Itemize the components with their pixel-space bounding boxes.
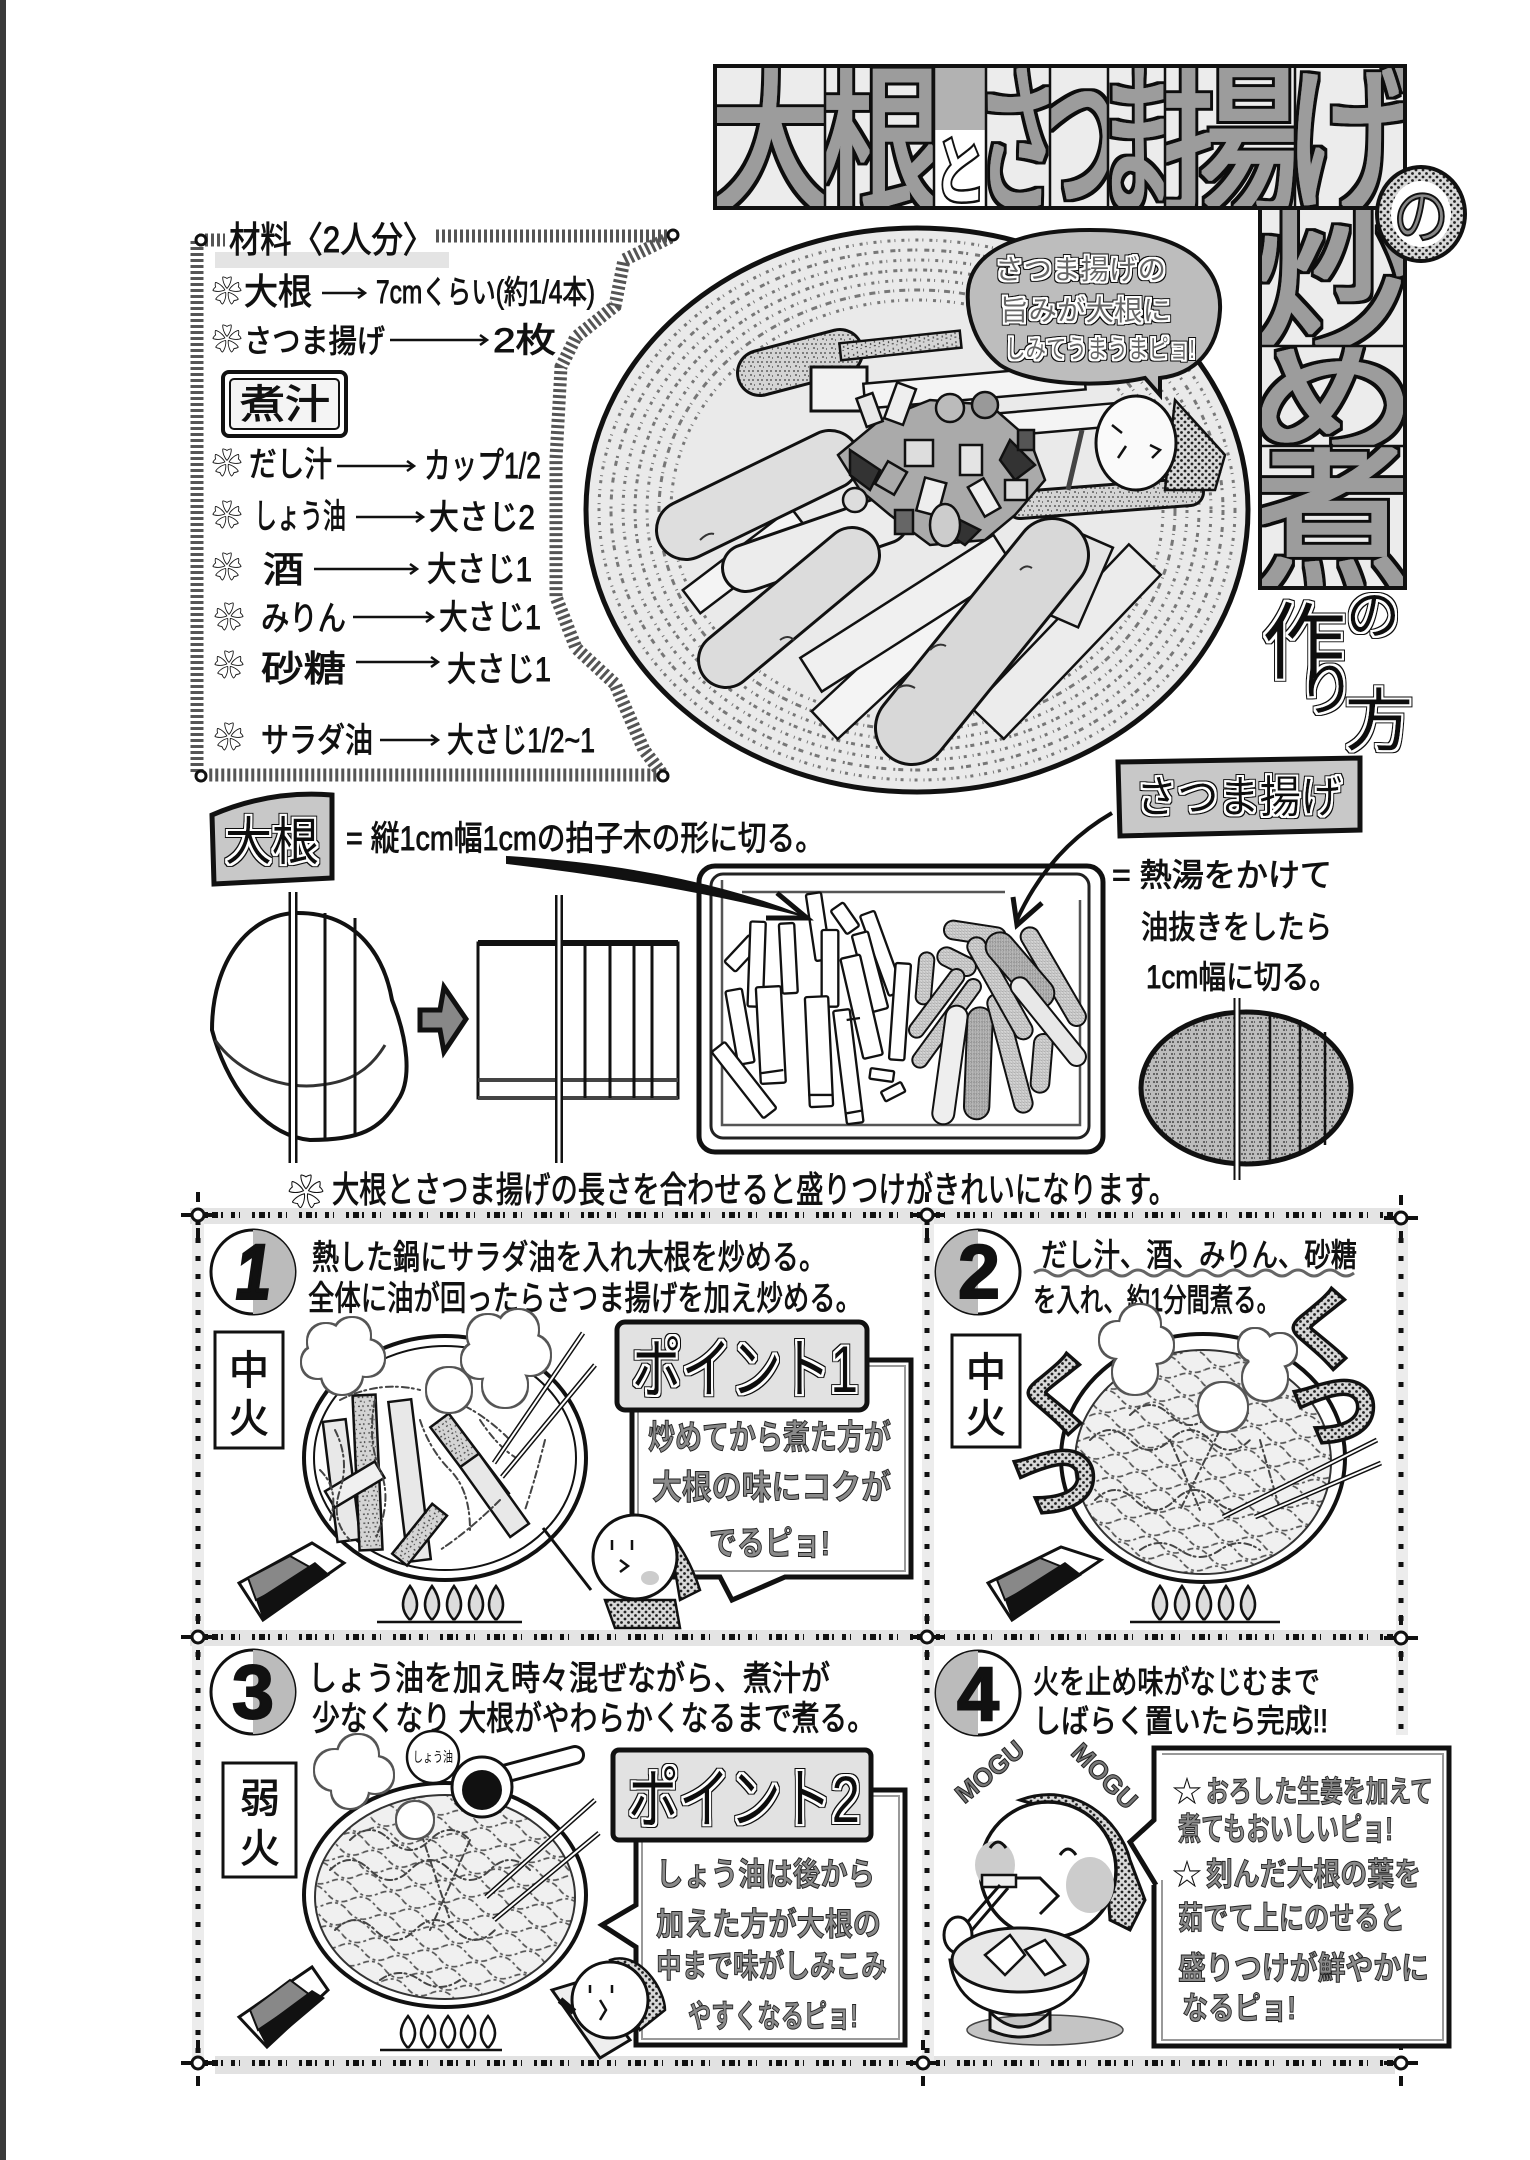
flames: [380, 2016, 502, 2050]
tag: satsuma-age: [1118, 758, 1360, 836]
tips callout: 盛りつけが鮮やかに: [1178, 1950, 1429, 1986]
ingredient: soy sauce: [212, 498, 535, 537]
heading smear: [215, 252, 449, 268]
speech bubble: しみてうまうまピョ!: [1005, 334, 1195, 364]
title: daikon and satsuma-age: [706, 51, 1413, 235]
heat label: medium: 中: [229, 1349, 269, 1393]
step 4 text: しばらく置いたら完成!!: [1033, 1703, 1328, 1739]
ingredient: soy sauce: しょう油: [254, 498, 346, 536]
point 2 callout: しょう油は後から: [656, 1856, 875, 1892]
speech bubble: さつま揚げの: [995, 254, 1166, 285]
chopsticks: [494, 1333, 595, 1477]
sound effect: MOGU MOGU: MOGU: [949, 1734, 1030, 1809]
ingredient: daikon: 7cmくらい(約1/4本): [376, 274, 595, 310]
tips callout: おろした生姜を加えて: [1206, 1776, 1433, 1809]
mascot eating: [944, 1795, 1145, 2045]
step number 4: 4: [957, 1652, 999, 1737]
panel: step 4: [936, 1651, 1449, 2046]
sound effect: simmering: く: [1015, 1349, 1099, 1443]
diagram: round satsuma-age being cut: [1141, 998, 1351, 1180]
ingredient: salad oil: [214, 722, 595, 760]
step 2 text: [1033, 1237, 1357, 1318]
title: how to make: 方: [1345, 684, 1413, 760]
ingredient: dashi: [212, 445, 541, 486]
title: how to make: の: [1346, 586, 1400, 646]
note: match lengths: ❀: [288, 1172, 324, 1213]
note: match lengths: 大根とさつま揚げの長さを合わせると盛りつけがきれいになります。: [332, 1169, 1176, 1210]
sound effect: MOGU MOGU: [949, 1734, 1144, 1815]
title: how to make: [1262, 586, 1413, 760]
heat label: low: 火: [240, 1827, 280, 1871]
arrow: satsuma-age to tray: [1013, 813, 1112, 925]
panel: step 2: [936, 1230, 1381, 1622]
pan handle: [239, 1543, 344, 1620]
ladle: [452, 1755, 575, 1817]
satsuma-age preparation text: [1112, 857, 1337, 995]
tag: daikon: 大根: [225, 814, 319, 872]
step number 2: 2: [958, 1230, 1000, 1315]
step 1 text: 全体に油が回ったらさつま揚げを加え炒める。: [308, 1280, 862, 1318]
title: how to make: 作: [1262, 596, 1346, 690]
ingredient: soy sauce: ❀: [212, 500, 242, 533]
ingredient: salad oil: 大さじ1/2~1: [447, 722, 595, 760]
ingredient: daikon: 大根: [244, 271, 312, 312]
tips callout: ☆: [1172, 1859, 1202, 1892]
ingredient: satsuma-age: さつま揚げ: [244, 323, 385, 359]
pan with food, step 2: [988, 1305, 1381, 1622]
diagram: round daikon being cut: [212, 892, 407, 1163]
ingredient: mirin: 大さじ1: [439, 599, 541, 637]
step 3 text: [308, 1660, 875, 1738]
flames: [1130, 1586, 1280, 1622]
note: match lengths: [288, 1169, 1176, 1213]
title letter cell: め: め: [1248, 327, 1418, 473]
steps frame: [181, 1192, 1418, 2086]
ingredient: salad oil: サラダ油: [261, 722, 373, 760]
mascot with soy sauce bottle: [552, 1958, 665, 2058]
garnish pile: [838, 382, 1045, 546]
tips callout: [1130, 1748, 1449, 2046]
page edge bar: [0, 0, 6, 2160]
ingredient: sake: 酒: [263, 549, 304, 590]
heat label: medium: 火: [229, 1397, 269, 1441]
ingredient: sugar: [214, 648, 551, 689]
tag: daikon: [212, 794, 332, 884]
ingredient: satsuma-age: ❀: [212, 324, 242, 357]
steam: [315, 1735, 433, 1838]
chopsticks: [1223, 1440, 1381, 1517]
point 1 callout: でるピョ!: [709, 1525, 830, 1563]
satsuma-age preparation text: 油抜きをしたら: [1141, 909, 1332, 945]
point 2 callout: やすくなるピョ!: [688, 1998, 858, 2034]
ingredient: mirin: [214, 599, 541, 638]
heat label: medium: [952, 1335, 1020, 1447]
mascot with pointer: [543, 1515, 700, 1628]
ingredient: sugar: 砂糖: [261, 648, 346, 689]
point 1 callout: [617, 1322, 911, 1600]
point 2 callout: 加えた方が大根の: [656, 1906, 881, 1942]
step 4 text: [1033, 1664, 1328, 1739]
ingredient: dashi: だし汁: [249, 446, 332, 484]
head: [980, 1802, 1116, 1938]
plate body: [586, 228, 1248, 792]
daikon cutting instruction: = 縦1cm幅1cmの拍子木の形に切る。: [346, 820, 824, 858]
title: stir-fried simmer, vertical block: [1248, 194, 1418, 614]
pan with food, step 3: [239, 1731, 599, 2050]
step 3 text: しょう油を加え時々混ぜながら、煮汁が: [308, 1660, 830, 1698]
title letter cell: 炒: 炒: [1250, 194, 1415, 373]
heat label: medium: 火: [966, 1397, 1006, 1441]
tips callout: なるピョ!: [1182, 1990, 1296, 2026]
speech bubble: 旨みが大根に: [1000, 295, 1171, 326]
plate of daikon and satsuma-age: [586, 228, 1248, 792]
point 1 callout: 大根の味にコクが: [652, 1468, 891, 1507]
tips callout: 刻んだ大根の葉を: [1206, 1856, 1421, 1892]
ingredient: sake: ❀: [212, 552, 242, 585]
diagram: daikon cut into slices: [478, 895, 678, 1163]
daikon and satsuma-age pieces: [683, 331, 1190, 739]
tips callout: ☆: [1172, 1776, 1202, 1809]
scarf: [1020, 1795, 1145, 1930]
bowl: [950, 1960, 1088, 2015]
sauce label box: 煮汁: [240, 383, 330, 427]
daikon sticks: [712, 892, 911, 1124]
ingredient: dashi: ❀: [212, 448, 242, 481]
pan with food, step 1: [239, 1310, 595, 1622]
steam: [1100, 1305, 1296, 1431]
label: soy sauce: しょう油: [413, 1749, 453, 1765]
shadow: [967, 2015, 1123, 2045]
satsuma-age preparation text: 1cm幅に切る。: [1146, 959, 1337, 995]
step 1 text: 熱した鍋にサラダ油を入れ大根を炒める。: [312, 1239, 826, 1277]
label: soy sauce: [407, 1731, 459, 1783]
sound effect: MOGU MOGU: MOGU: [1065, 1737, 1144, 1815]
title letter cell: と: [934, 68, 986, 214]
satsuma-age strips: [917, 930, 1077, 1113]
arrow: daikon to tray: [507, 857, 807, 918]
heat label: low: [223, 1763, 296, 1877]
step number 3: 3: [232, 1650, 274, 1735]
title: の in dotted circle: [1377, 167, 1465, 261]
point 2 callout: [602, 1750, 905, 2045]
ingredient: salad oil: ❀: [214, 722, 244, 755]
speech bubble: [968, 230, 1220, 395]
ingredient: mirin: ❀: [214, 602, 244, 635]
title: の in dotted circle: の: [1393, 183, 1449, 252]
sound effect: simmering: [1012, 1284, 1378, 1529]
sound effect: simmering: つ: [1292, 1363, 1378, 1459]
heat label: medium: 中: [966, 1351, 1006, 1395]
steam: [302, 1310, 550, 1412]
panel: ingredients: [196, 219, 678, 781]
title letter cell: 煮: 煮: [1250, 430, 1415, 614]
ingredient: daikon: [212, 271, 595, 312]
ingredient: satsuma-age: [212, 322, 556, 360]
ingredient: dashi: カップ1/2: [424, 445, 541, 486]
ingredient: satsuma-age: 2枚: [493, 322, 556, 360]
ingredient: daikon: ❀: [212, 276, 242, 309]
step number 2: [936, 1230, 1020, 1315]
point 2 callout: 中まで味がしみこみ: [656, 1948, 887, 1984]
panel: step 3: [211, 1650, 905, 2058]
step 3 text: 少なくなり 大根がやわらかくなるまで煮る。: [312, 1700, 875, 1738]
sound effect: simmering: つ: [1012, 1433, 1098, 1529]
point 1 callout: ポイント1: [632, 1332, 858, 1406]
step 2 text: だし汁、酒、みりん、砂糖: [1041, 1237, 1357, 1273]
heat label: low: 弱: [240, 1777, 280, 1821]
flames: [377, 1586, 522, 1622]
mascot on plate: [1068, 396, 1225, 490]
heading: 材料〈2人分〉: [229, 219, 434, 260]
step number 4: [936, 1651, 1020, 1737]
step 2 text: を入れ、約1分間煮る。: [1033, 1282, 1280, 1318]
title: how to make: り: [1296, 656, 1356, 723]
ingredient: sake: [212, 549, 532, 590]
step 4 text: 火を止め味がなじむまで: [1033, 1664, 1320, 1700]
ingredient: mirin: みりん: [261, 600, 346, 638]
point 1 callout: 炒めてから煮た方が: [648, 1418, 891, 1457]
ingredient: sugar: ❀: [214, 650, 244, 683]
step number 3: [211, 1650, 295, 1735]
pan handle: [988, 1547, 1101, 1620]
tips callout: 煮てもおいしいピョ!: [1178, 1811, 1393, 1847]
pan handle: [239, 1967, 328, 2047]
satsuma-age preparation text: = 熱湯をかけて: [1112, 857, 1332, 893]
sound effect: simmering: く: [1280, 1284, 1364, 1378]
diagram: tray with cut strips: [699, 866, 1103, 1152]
ingredient: soy sauce: 大さじ2: [429, 499, 535, 537]
corner studs: [196, 230, 678, 781]
panel: step 1: [211, 1230, 911, 1628]
sauce label box: [223, 372, 346, 436]
tips callout: 茹でて上にのせると: [1178, 1900, 1405, 1936]
step number 1: [211, 1230, 295, 1315]
point 2 callout: ポイント2: [628, 1762, 860, 1836]
step 1 text: [308, 1239, 862, 1318]
ingredient: sake: 大さじ1: [427, 551, 532, 589]
ingredient: sugar: 大さじ1: [447, 651, 551, 689]
chopsticks: [486, 1800, 599, 1920]
heat label: medium: [215, 1332, 283, 1448]
hand: [944, 1917, 972, 1953]
icon: fat arrow: [420, 987, 466, 1052]
tag: satsuma-age: さつま揚げ: [1136, 773, 1342, 822]
ingredients border: [197, 236, 673, 775]
step number 1: 1: [231, 1230, 277, 1315]
